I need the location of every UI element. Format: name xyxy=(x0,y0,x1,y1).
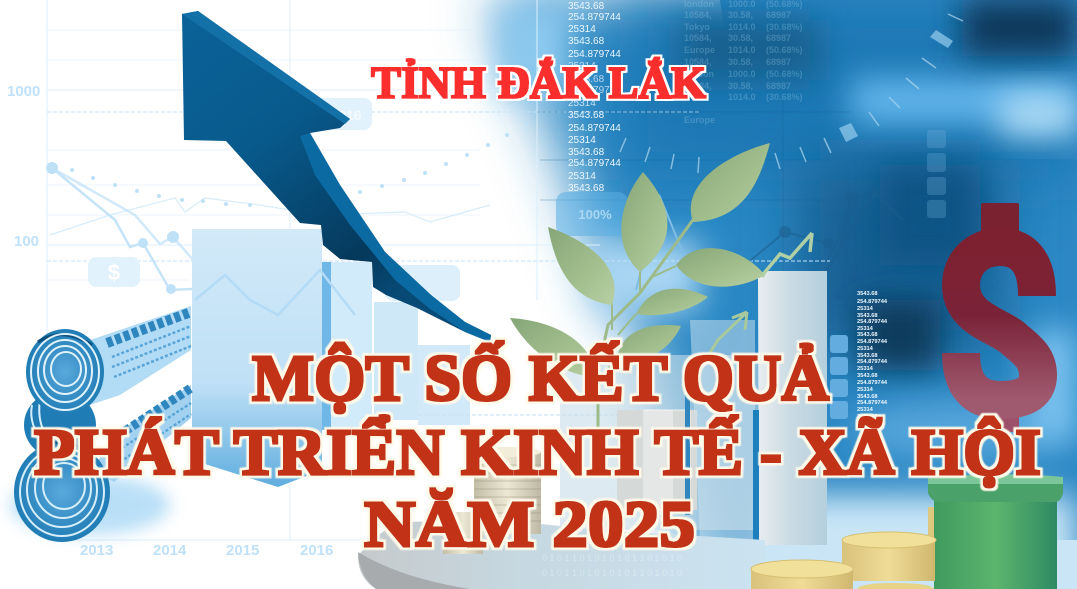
axis labels: 2015 xyxy=(226,542,259,559)
speech bubbles: 100% xyxy=(578,207,612,222)
dim data table: 30.58, xyxy=(728,81,753,91)
number column right xyxy=(857,291,888,420)
speech bubbles xyxy=(88,98,628,301)
gold coin stacks right xyxy=(751,532,936,589)
number column top: 3543.68 xyxy=(568,110,605,121)
building blocks and lower center cluster xyxy=(560,320,770,540)
number column right: 254.879744 xyxy=(857,339,888,345)
dim data table: 10584, xyxy=(684,81,712,91)
dim data table: 1000.0 xyxy=(728,69,756,79)
silver platform: 0 1 0 1 1 0 1 0 1 0 1 0 1 1 0 1 0 1 0 xyxy=(542,568,682,578)
dim data table: (30.68%) xyxy=(766,22,803,32)
pale 3D bar chart xyxy=(192,229,470,487)
number column right: 254.879744 xyxy=(857,400,888,406)
dim data table: 10584, xyxy=(684,33,712,43)
number column top: 254.879744 xyxy=(568,85,621,96)
number column right: 254.879744 xyxy=(857,319,888,325)
axis labels: 2016 xyxy=(300,542,333,559)
tall white pillar xyxy=(753,271,827,545)
number column right: 3543.68 xyxy=(857,394,878,400)
dim data table: 10584, xyxy=(684,10,712,20)
silver platform xyxy=(358,520,765,589)
number column top: 254.879744 xyxy=(568,123,621,134)
number column right: 3543.68 xyxy=(857,353,878,359)
number column top: 3543.68 xyxy=(568,74,605,85)
heading line 1: MỘT SỐ KẾT QUẢ xyxy=(252,341,829,415)
dim data table: 68987 xyxy=(766,57,791,67)
axis labels xyxy=(7,83,333,559)
number column top: 25314 xyxy=(568,98,596,109)
number column top: 25314 xyxy=(568,135,596,146)
dim data table: (50.68%) xyxy=(766,45,803,55)
number column right: 25314 xyxy=(857,306,874,312)
faint square stack xyxy=(927,130,946,218)
number column right: 25314 xyxy=(857,407,874,413)
number column top: 3543.68 xyxy=(568,1,605,12)
dim data table: Europe xyxy=(684,115,715,125)
axis labels: 2013 xyxy=(80,542,113,559)
dim data table: (30.68%) xyxy=(766,92,803,102)
number column right: 25314 xyxy=(857,387,874,393)
dim data table: Tokyo xyxy=(684,22,710,32)
number column right: 3543.68 xyxy=(857,414,878,420)
dim data table: (50.68%) xyxy=(766,69,803,79)
number column right: 25314 xyxy=(857,366,874,372)
speech bubbles: 2016 xyxy=(330,107,362,123)
dim data table: london xyxy=(684,69,714,79)
silver platform: 0 1 0 1 1 0 1 0 1 0 1 0 1 1 0 1 0 1 0 xyxy=(542,553,682,563)
number column top: 254.879744 xyxy=(568,12,621,23)
number column right: 254.879744 xyxy=(857,359,888,365)
main heading xyxy=(34,341,1041,561)
dim data table: 30.58, xyxy=(728,10,753,20)
dim data table: 68987 xyxy=(766,81,791,91)
speech bubbles: $ xyxy=(108,260,120,285)
upward arrow xyxy=(182,11,491,342)
number column top: 3543.68 xyxy=(568,36,605,47)
dim data table: 1014.0 xyxy=(728,22,756,32)
dim data table: 68987 xyxy=(766,10,791,20)
gauge tick arc xyxy=(620,14,963,173)
number column right: 254.879744 xyxy=(857,299,888,305)
pale trend line left of plant xyxy=(636,197,690,290)
number column right: 3543.68 xyxy=(857,291,878,297)
dim data table: 10584, xyxy=(684,57,712,67)
number column top: 254.879744 xyxy=(568,158,621,169)
number column right: 3543.68 xyxy=(857,332,878,338)
rolled blueprint papers xyxy=(10,306,191,542)
dim data table: 1014.0 xyxy=(728,92,756,102)
number column right: 25314 xyxy=(857,346,874,352)
number column top: 25314 xyxy=(568,171,596,182)
dim data table: 30.58, xyxy=(728,57,753,67)
dim data table: 68987 xyxy=(766,33,791,43)
number column right: 254.879744 xyxy=(857,380,888,386)
number column top: 25314 xyxy=(568,61,596,72)
number column top: 3543.68 xyxy=(568,183,605,194)
number column right: 3543.68 xyxy=(857,373,878,379)
plant with leaves xyxy=(510,143,812,428)
dim data table: 1014.0 xyxy=(728,45,756,55)
number column right: 3543.68 xyxy=(857,313,878,319)
background line chart xyxy=(50,168,490,300)
dollar sign xyxy=(961,203,1038,432)
number column right: 25314 xyxy=(857,326,874,332)
dark trend line chart xyxy=(745,189,903,290)
number column top: 254.879744 xyxy=(568,49,621,60)
axis labels: 100 xyxy=(14,233,39,250)
heading line 2: PHÁT TRIỂN KINH TẾ - XÃ HỘI xyxy=(34,415,1041,489)
heading line 3: NĂM 2025 xyxy=(364,488,695,561)
chart grid lines xyxy=(47,0,830,540)
number column top: 25314 xyxy=(568,24,596,35)
dim data table xyxy=(684,0,803,125)
number column top xyxy=(568,1,621,194)
dim data table: Europe xyxy=(684,45,715,55)
number column top: 3543.68 xyxy=(568,147,605,158)
axis labels: 1000 xyxy=(7,83,40,100)
coin stacks center xyxy=(443,447,541,554)
light square stack xyxy=(830,335,848,419)
green jar xyxy=(928,474,1063,589)
dim data table: 30.58, xyxy=(728,33,753,43)
axis labels: 2014 xyxy=(153,542,187,559)
title: province name: TỈNH ĐẮK LẮK xyxy=(371,58,706,108)
